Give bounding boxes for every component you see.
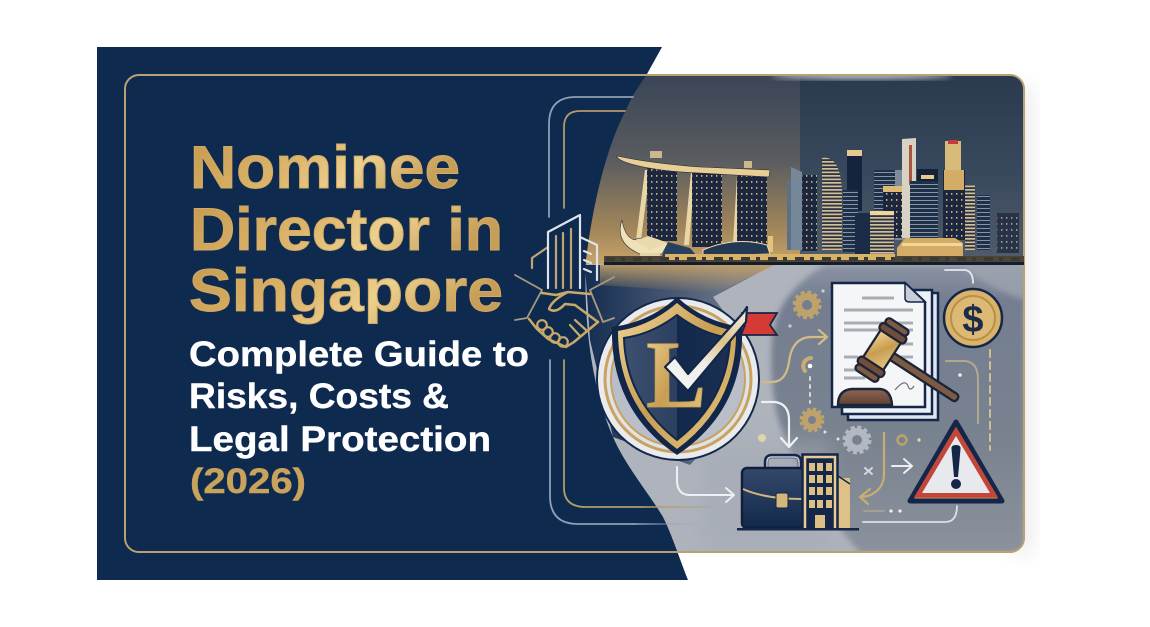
image card: skyline and legal illustration background: [560, 73, 1032, 555]
connector arrows and small details: [677, 270, 990, 522]
subtitle: (2026): [190, 462, 306, 501]
icon: legal shield with check badge: [596, 297, 777, 461]
icon: contract document with gavel: [832, 283, 974, 425]
title: Director in: [190, 196, 503, 263]
icon: dollar coin: [944, 289, 1002, 347]
gavel head and handle: [853, 316, 974, 425]
title: Nominee: [190, 134, 460, 201]
city towers: [787, 138, 1019, 258]
gold frame: [125, 75, 1024, 552]
title: [189, 134, 503, 324]
navy panel with curved right edge: [97, 47, 688, 580]
skyline: Marina Bay Sands and city towers: [604, 138, 1024, 265]
inner decorative line frames: [549, 97, 730, 524]
check mark: [665, 307, 747, 391]
icon: gears: [794, 292, 870, 453]
subtitle: Legal Protection: [189, 420, 491, 459]
subtitle: [189, 335, 529, 501]
icon: building with handshake: [515, 215, 614, 347]
subtitle: Risks, Costs &: [189, 377, 449, 416]
icon: dollar coin: $: [962, 299, 984, 341]
icon: briefcase and office building: [737, 454, 859, 530]
red ribbon: [741, 313, 777, 335]
subtitle: Complete Guide to: [189, 335, 529, 374]
icon: warning triangle: [910, 422, 1002, 501]
ArtScience Museum: [620, 220, 770, 262]
waterfront and water line: [604, 256, 1024, 263]
title: Singapore: [189, 257, 503, 324]
Marina Bay Sands: [617, 151, 773, 252]
gavel base: [838, 389, 892, 405]
letter L: L: [646, 321, 706, 428]
